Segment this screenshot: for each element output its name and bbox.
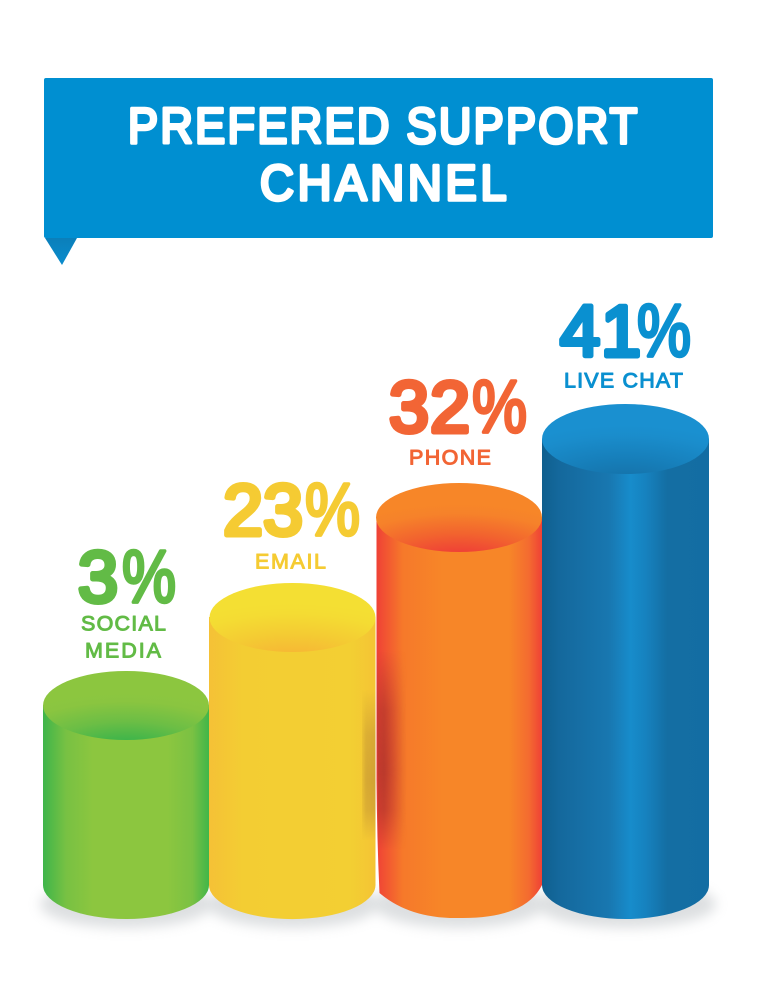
value: 23% email: %: [305, 468, 360, 551]
value: 23% email: [223, 468, 360, 574]
value: 3% social media: [78, 535, 176, 662]
value: 3% social media: 3: [78, 538, 118, 618]
title: CHANNEL: [260, 156, 510, 212]
value: 41% live chat: LIVE CHAT: [564, 368, 683, 392]
bar: phone 32%: [376, 483, 542, 918]
banner panel: [44, 78, 713, 238]
value: 32% phone: PHONE: [409, 446, 491, 470]
title: [128, 99, 640, 212]
value: 32% phone: 32: [389, 368, 470, 448]
value: 41% live chat: [560, 289, 691, 392]
value: 32% phone: [389, 365, 527, 470]
value: 3% social media: SOCIAL: [81, 612, 166, 636]
bar: live chat 41%: [542, 404, 709, 919]
title: PREFERED SUPPORT: [128, 99, 640, 155]
value: 3% social media: %: [122, 535, 176, 618]
value: 23% email: 23: [223, 471, 303, 551]
cylinder shadows: [40, 880, 716, 928]
value: 23% email: EMAIL: [255, 550, 326, 574]
title banner: [44, 78, 713, 265]
value: 41% live chat: %: [637, 289, 691, 372]
value: 41% live chat: 41: [560, 292, 641, 372]
value: 3% social media: MEDIA: [85, 638, 162, 662]
value: 32% phone: %: [472, 365, 527, 448]
banner tail: [45, 238, 77, 265]
bar: social media 3%: [43, 671, 209, 919]
bar: email 23%: [209, 583, 376, 919]
